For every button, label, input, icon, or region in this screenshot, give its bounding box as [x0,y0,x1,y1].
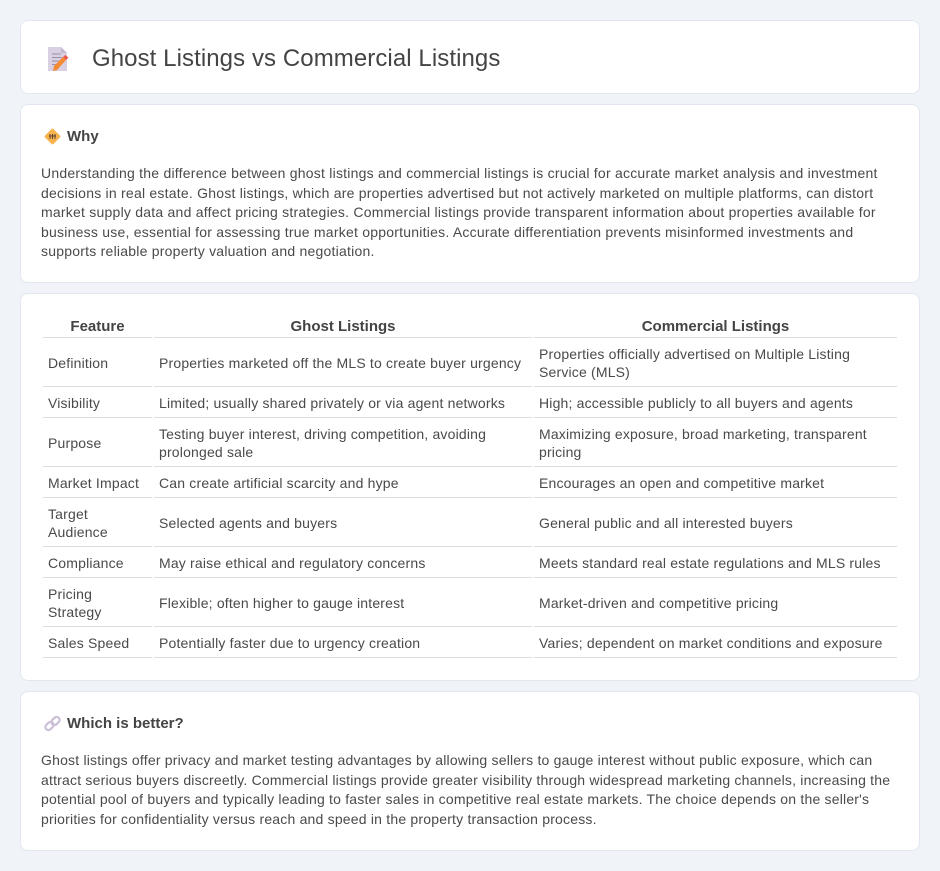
icon: document with pencil [48,47,68,71]
text block: why explanation: business use, essential for assessing true market opportunities. Accurate differentiation prevents misinformed investments and [41,224,853,240]
table rows: Maximizing exposure, broad marketing, transparent [539,426,867,442]
table header row [70,318,789,335]
text block: verdict: Ghost listings offer privacy and market testing advantages by allowing sellers to gauge interest without public exposure, which can [41,752,872,768]
text block: verdict [41,752,890,827]
text block: verdict: priorities for confidentiality versus reach and speed in the property transaction process. [41,811,597,827]
table rows [43,337,897,658]
title: Ghost Listings vs Commercial Listings [92,45,500,72]
text block: why explanation: decisions in real estate. Ghost listings, which are properties advertised but not actively marketed on multiple platforms, can distort [41,185,873,201]
table rows: Testing buyer interest, driving competition, avoiding [159,426,486,442]
table header row: Feature [70,318,125,335]
table rows: High; accessible publicly to all buyers and agents [539,395,853,411]
table rows: Market-driven and competitive pricing [539,595,778,611]
table rows: May raise ethical and regulatory concerns [159,555,426,571]
text block: why explanation: supports reliable property valuation and negotiation. [41,243,375,259]
panel: which is better [20,691,920,851]
table header row: Ghost Listings [290,318,396,335]
table rows: Target [48,506,88,522]
table rows: Service (MLS) [539,364,630,380]
table rows: Audience [48,524,108,540]
icon: warning diamond [44,128,60,144]
panel: comparison table [20,293,920,681]
table rows: Compliance [48,555,124,571]
text block: why explanation: market supply data and affect pricing strategies. Commercial listings provide transparent information about properties available for [41,204,876,220]
table rows: Properties officially advertised on Multiple Listing [539,346,850,362]
text block: verdict: potential pool of buyers and typically leading to faster sales in competitive real estate markets. The choice depends on the seller's [41,791,869,807]
table rows: pricing [539,444,582,460]
table rows: Sales Speed [48,635,129,651]
text block: why explanation: Understanding the difference between ghost listings and commercial listings is crucial for accurate market analysis and investment [41,165,878,181]
table rows: General public and all interested buyers [539,515,793,531]
panel: why [20,104,920,283]
table rows: Limited; usually shared privately or via agent networks [159,395,505,411]
heading: why: Why [67,128,99,145]
text block: why explanation [41,165,878,259]
table rows: Definition [48,355,108,371]
table rows: Pricing [48,586,92,602]
icon: chain link [44,716,61,732]
table rows: Properties marketed off the MLS to create buyer urgency [159,355,521,371]
table header row: Commercial Listings [642,318,789,335]
table rows: Can create artificial scarcity and hype [159,475,399,491]
table rows: Purpose [48,435,101,451]
heading: which is better: Which is better? [67,715,184,732]
table rows: Potentially faster due to urgency creation [159,635,420,651]
table rows: Strategy [48,604,102,620]
table rows: Visibility [48,395,100,411]
text block: verdict: attract serious buyers discreetly. Commercial listings provide greater visibility through widespread marketing channels, increasing the [41,772,890,788]
panel: title header [20,20,920,94]
table rows: Selected agents and buyers [159,515,337,531]
table rows: Market Impact [48,475,139,491]
table rows: Encourages an open and competitive market [539,475,824,491]
table rows: Meets standard real estate regulations and MLS rules [539,555,881,571]
table rows: prolonged sale [159,444,253,460]
table rows: Varies; dependent on market conditions and exposure [539,635,883,651]
table rows: Flexible; often higher to gauge interest [159,595,404,611]
